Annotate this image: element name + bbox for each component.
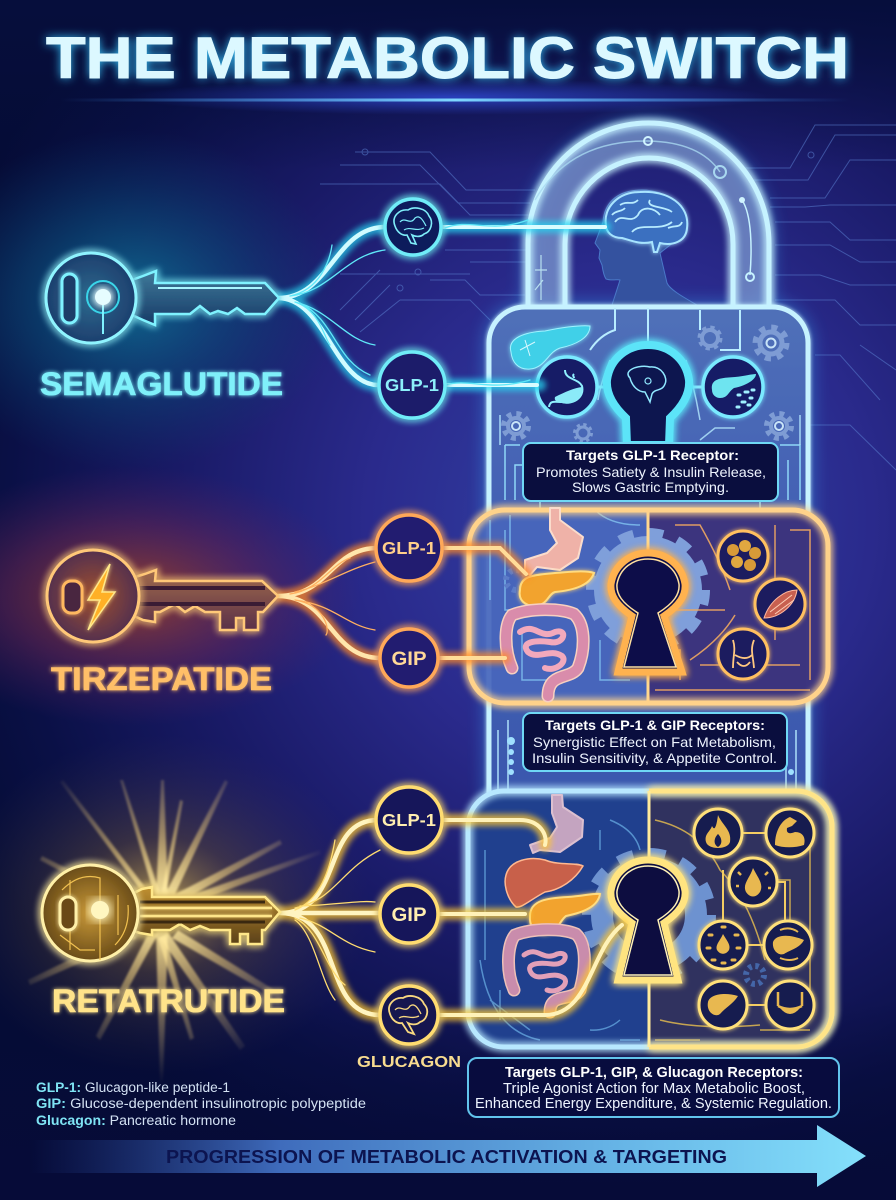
retatrutide organs [505, 795, 600, 1012]
caption: semaglutide: Targets GLP-1 Receptor: [566, 447, 739, 463]
lock [468, 123, 832, 1047]
legend: Glucagon: Pancreatic hormone [36, 1113, 236, 1128]
legend: GIP: Glucose-dependent insulinotropic polypeptide [36, 1096, 366, 1111]
caption: semaglutide: Slows Gastric Emptying. [572, 479, 729, 495]
gear behind keyhole 2 [596, 538, 700, 642]
caption: semaglutide [523, 443, 778, 501]
node: retatrutide GIP [380, 885, 438, 943]
legend: GLP-1: Glucagon-like peptide-1 [36, 1080, 230, 1095]
pancreas [530, 894, 600, 934]
caption: retatrutide: Triple Agonist Action for Max Metabolic Boost, [503, 1081, 805, 1097]
intestines [506, 610, 583, 696]
pancreas [520, 571, 594, 606]
node: tirzepatide GIP [380, 629, 438, 687]
upper panel pancreas [510, 326, 590, 369]
node: semaglutide GLP-1 [379, 352, 445, 418]
progression arrow [30, 1125, 866, 1187]
stomach circle [537, 357, 597, 417]
node: retatrutide GLP-1: GLP-1 [382, 810, 436, 830]
label: glucagon: GLUCAGON [357, 1054, 461, 1071]
caption: tirzepatide: Insulin Sensitivity, & Appetite Control. [532, 750, 777, 766]
icon: waist [766, 981, 814, 1029]
circuit trace background [320, 125, 896, 470]
retatrutide keyhole [611, 860, 685, 980]
tirzepatide target icon: waist [718, 629, 768, 679]
light rays behind Retatrutide key [28, 780, 321, 1085]
node: retatrutide brain [380, 986, 438, 1044]
icon: liver [699, 981, 747, 1029]
progression arrow: PROGRESSION OF METABOLIC ACTIVATION & TARGETING [166, 1146, 727, 1167]
node: tirzepatide GLP-1 [376, 515, 442, 581]
label: semaglutide: SEMAGLUTIDE [40, 366, 283, 402]
retatrutide connector wires [280, 820, 622, 1015]
label: retatrutide: RETATRUTIDE [52, 983, 285, 1019]
key: tirzepatide [47, 550, 278, 642]
liver [505, 859, 583, 907]
icon: bicep [766, 809, 814, 857]
lock body [489, 307, 808, 1022]
caption: retatrutide: Targets GLP-1, GIP, & Glucagon Receptors: [505, 1065, 803, 1081]
title: THE METABOLIC SWITCH [46, 26, 849, 91]
node: tirzepatide GLP-1: GLP-1 [382, 538, 436, 558]
semaglutide connector wires [278, 220, 605, 385]
stomach [525, 508, 583, 575]
label: tirzepatide: TIRZEPATIDE [51, 661, 272, 697]
upper panel keyhole [598, 345, 702, 445]
legend [36, 1080, 366, 1128]
key: semaglutide [46, 253, 279, 343]
caption: tirzepatide: Synergistic Effect on Fat Metabolism, [533, 734, 776, 750]
head silhouette with brain [595, 190, 697, 305]
lock shackle [528, 123, 769, 320]
caption: semaglutide: Promotes Satiety & Insulin Release, [536, 464, 766, 480]
tirzepatide organs [506, 508, 594, 696]
node: semaglutide GLP-1: GLP-1 [385, 375, 439, 395]
title underline [60, 79, 850, 115]
caption: tirzepatide: Targets GLP-1 & GIP Receptors: [545, 717, 765, 733]
intestines [508, 930, 584, 1012]
node: retatrutide GIP: GIP [392, 905, 427, 926]
node: tirzepatide GIP: GIP [392, 649, 427, 670]
gear behind keyhole 3 [593, 859, 705, 971]
icon: flame [694, 809, 742, 857]
caption: retatrutide: Enhanced Energy Expenditure, & Systemic Regulation. [475, 1096, 832, 1112]
stomach [530, 795, 583, 853]
gears in upper panel [504, 328, 791, 441]
caption: tirzepatide [523, 713, 787, 771]
retatrutide target icons [694, 809, 814, 1029]
tirzepatide target icon: fat cells [718, 531, 768, 581]
lock halo [489, 123, 808, 1022]
pancreas circle [703, 357, 763, 417]
icon: droplets [699, 921, 747, 969]
icon: fat drop [729, 858, 777, 906]
tirzepatide connector wires [278, 548, 526, 658]
panel: retatrutide lock section [468, 791, 832, 1047]
panel: tirzepatide lock section [469, 510, 828, 703]
tirzepatide target icon: muscle [755, 579, 805, 629]
key: retatrutide [42, 865, 280, 961]
icon: liver cycle [764, 921, 812, 969]
caption: retatrutide [468, 1058, 839, 1117]
node: retatrutide GLP-1 [376, 787, 442, 853]
tirzepatide keyhole [611, 553, 685, 672]
title: THE METABOLIC SWITCH [46, 26, 849, 91]
node: semaglutide brain [385, 199, 441, 255]
